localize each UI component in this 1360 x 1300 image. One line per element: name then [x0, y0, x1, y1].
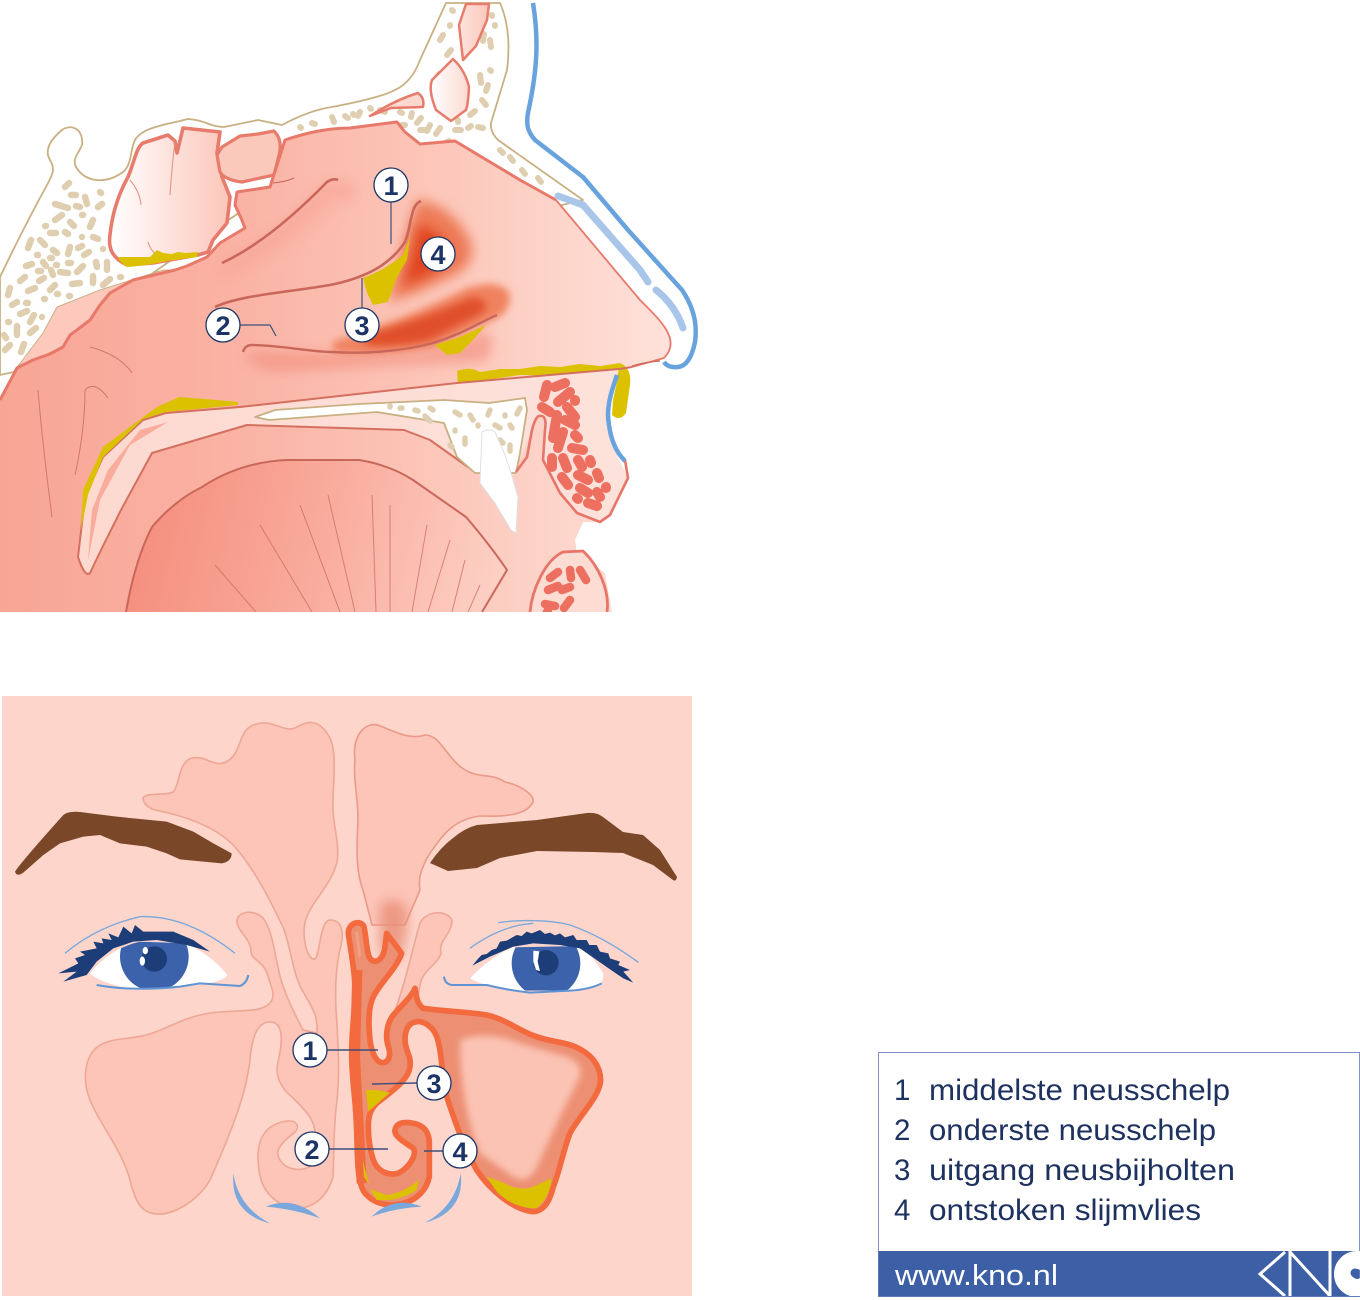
bone around the sinuses [0, 3, 583, 375]
frontal sinus cell upper [459, 4, 489, 60]
soft palate and hard palate tissue [78, 369, 628, 574]
label 3 frontal view [372, 1066, 451, 1100]
website address: www.kno.nl [894, 1260, 1058, 1292]
ethmoid air cell, large [110, 128, 230, 267]
legend item 1: 1 [894, 1074, 910, 1107]
label 3 frontal view: 3 [426, 1069, 442, 1099]
inferior turbinate body [246, 330, 492, 371]
right eye [444, 921, 638, 998]
label 3 side view: 3 [354, 311, 370, 341]
frontal recess redness [380, 900, 407, 960]
yellow mucus in cell [118, 250, 198, 267]
legend item 4: 4 [894, 1194, 910, 1227]
inferior turbinate line [243, 315, 497, 353]
label 1 frontal view [293, 1033, 378, 1067]
yellow mucus, middle meatus [363, 237, 410, 305]
blue skin line, forehead and nose [527, 3, 696, 367]
panel: frontal view of the face [2, 696, 692, 1296]
website band [878, 1251, 1360, 1296]
right eyebrow [430, 813, 677, 881]
throat folds [38, 347, 132, 517]
pale band between bone and mucosa [18, 270, 175, 366]
label 4 frontal view: 4 [452, 1137, 468, 1167]
superior turbinate [222, 178, 355, 264]
right ethmoid lobe [395, 913, 452, 1010]
label 2 frontal view [295, 1132, 388, 1166]
line under nose [632, 361, 660, 366]
tongue [126, 460, 507, 612]
ethmoid air cell, small [217, 131, 280, 182]
legend item 4: ontstoken slijmvlies [929, 1194, 1201, 1227]
head tissue, nose and lips [0, 122, 671, 612]
mucosa outline [0, 122, 556, 400]
label 1 side view [374, 168, 408, 244]
incisor tooth [480, 430, 518, 533]
inflamed inferior turbinate band [333, 284, 510, 354]
label 2 frontal view: 2 [304, 1135, 320, 1165]
yellow mucus, inferior meatus [435, 325, 486, 355]
left eye [58, 917, 248, 991]
nasal cartilage [558, 196, 683, 328]
speckles in bone [4, 183, 121, 352]
lower lip with muscle [530, 551, 607, 612]
soft palate inner stripe [88, 422, 168, 560]
icon: KNO logo [1260, 1250, 1360, 1297]
yellow mucus in lower meatus [363, 1160, 419, 1200]
frontal sinus cell middle [431, 59, 469, 121]
blue skin line, upper lip [608, 375, 625, 461]
left eyebrow [15, 812, 232, 875]
label 2 side view [206, 308, 276, 342]
label 3 side view [345, 278, 379, 342]
nostrils [233, 1173, 461, 1223]
yellow mucus, nostril floor and upper lip [457, 363, 630, 418]
left sinuses and nasal structures [85, 722, 342, 1214]
frontal sinus cell lower [370, 93, 423, 116]
middle turbinate line [215, 201, 421, 307]
yellow mucus on soft palate [81, 397, 238, 530]
legend item 3: uitgang neusbijholten [929, 1154, 1235, 1187]
label 4 frontal view [424, 1134, 477, 1168]
inflamed mucosa and right maxillary sinus [348, 923, 601, 1212]
pale sinus interior [460, 1036, 581, 1179]
label 2 side view: 2 [215, 311, 231, 341]
hard palate bone [255, 398, 527, 473]
yellow mucus in middle meatus [366, 1090, 390, 1112]
legend item 2: 2 [894, 1114, 910, 1147]
label 1 frontal view: 1 [302, 1036, 318, 1066]
legend panel [878, 1052, 1360, 1297]
legend item 3: 3 [894, 1154, 910, 1187]
panel: side view of the nose [0, 3, 696, 612]
label 1 side view: 1 [383, 171, 399, 201]
legend item 1: middelste neusschelp [929, 1074, 1230, 1107]
label 4 side view [421, 237, 455, 271]
legend item 2: onderste neusschelp [929, 1114, 1216, 1147]
crack in mucosa [273, 178, 294, 183]
upper lip with muscle [516, 383, 628, 522]
yellow mucus in sinus [487, 1177, 552, 1208]
inflamed mucosa near label 4 [388, 200, 472, 302]
right frontal sinus [355, 725, 533, 925]
label 4 side view: 4 [430, 240, 446, 270]
